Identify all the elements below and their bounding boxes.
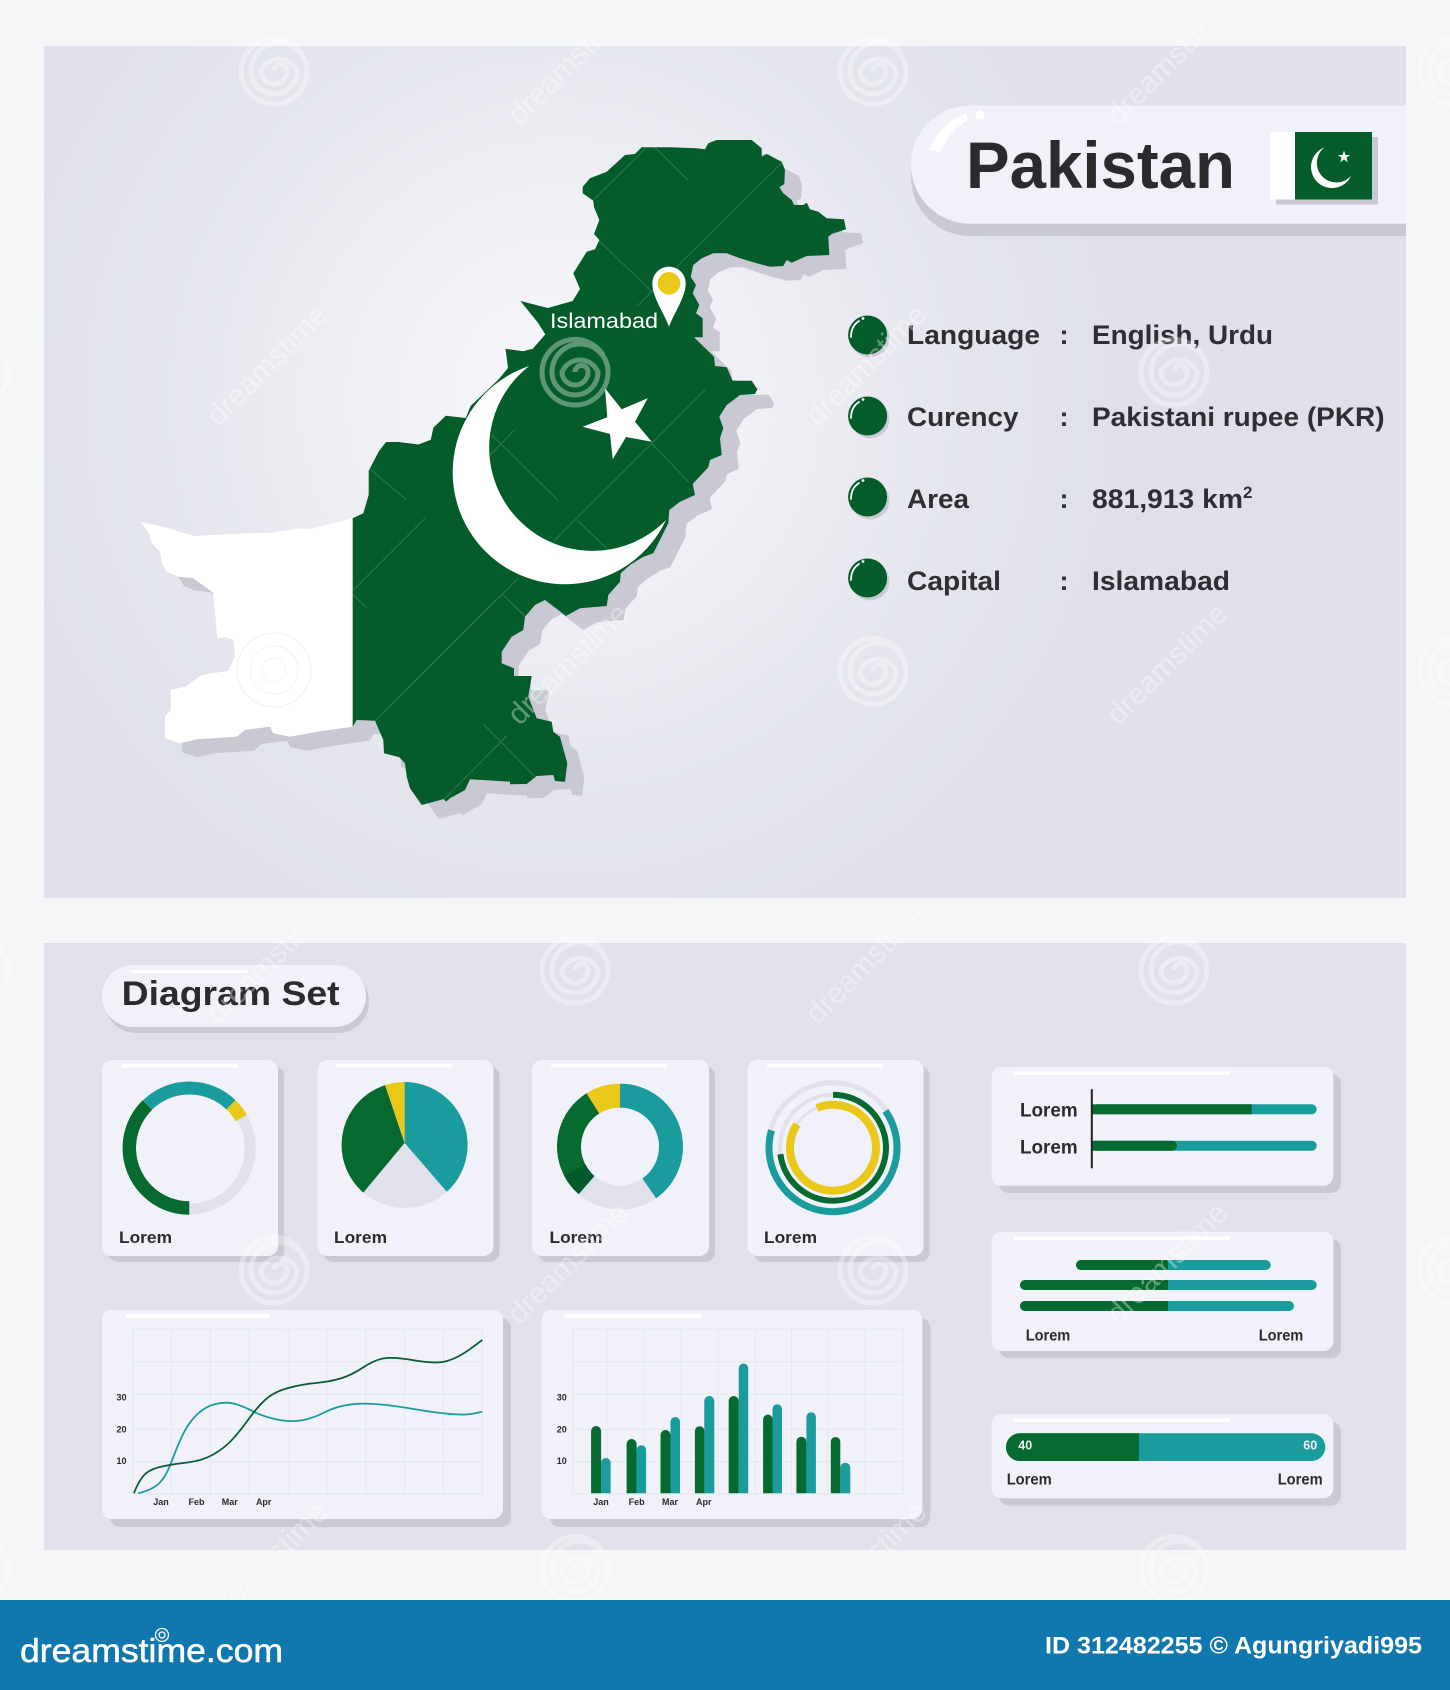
card: diverging bars: Lorem — [1259, 1328, 1303, 1345]
card: line chart: Apr — [256, 1497, 272, 1507]
card: diverging bars: Lorem — [1026, 1328, 1070, 1345]
watermark overlay: dreamstime — [1100, 1196, 1234, 1330]
map of Pakistan with flag fill — [140, 140, 863, 819]
card: line chart: Mar — [222, 1497, 238, 1507]
fact: area: 881,913 km — [1092, 484, 1243, 514]
card: 40/60 split bar — [992, 1414, 1341, 1506]
card: line chart: 20 — [116, 1424, 127, 1434]
fact: area — [848, 478, 1252, 520]
icon: capital location pin — [652, 267, 686, 327]
card: concentric rings chart — [744, 1059, 930, 1262]
fact: capital: Capital — [907, 566, 1001, 596]
fact: language: Language — [907, 320, 1040, 350]
card: donut chart: Lorem — [550, 1228, 602, 1247]
title text: Pakistan — [966, 128, 1235, 202]
fact: capital: Islamabad — [1092, 566, 1230, 596]
card: donut chart — [532, 1060, 715, 1262]
footer credit: ID 312482255 © Agungriyadi995 — [1045, 1632, 1422, 1659]
card: 40/60 split bar: 40 — [1018, 1438, 1032, 1452]
fact: capital: : — [1060, 566, 1068, 596]
fact: area: 2 — [1243, 483, 1252, 502]
icon: flag of Pakistan — [1270, 132, 1378, 204]
card: line chart: Feb — [188, 1497, 205, 1507]
card: bar chart: 10 — [557, 1456, 567, 1466]
card: 40/60 split bar: 60 — [1303, 1438, 1317, 1452]
card: diverging bars — [992, 1232, 1341, 1358]
card: line chart: 30 — [116, 1393, 127, 1403]
footer logo: dreamstime.com — [20, 1632, 283, 1669]
fact: capital — [848, 558, 1230, 600]
watermark overlay: dreamstime — [501, 1196, 635, 1330]
heading pill: Diagram Set — [102, 965, 369, 1033]
card: bar chart — [542, 1310, 930, 1527]
card: horizontal progress bars: Lorem — [1020, 1100, 1078, 1122]
card: concentric rings chart: Lorem — [764, 1228, 817, 1247]
footer bar — [0, 1600, 1450, 1690]
fact: language — [848, 316, 1273, 358]
fact: currency: : — [1060, 402, 1068, 432]
card: bar chart: Jan — [593, 1497, 609, 1507]
watermark overlay: dreamstime — [799, 896, 933, 1030]
card: bar chart: Mar — [662, 1497, 678, 1507]
card: pie chart: Lorem — [334, 1228, 387, 1247]
card: bar chart: Apr — [696, 1497, 712, 1507]
watermark overlay: dreamstime — [799, 298, 933, 432]
card: bar chart: 20 — [557, 1424, 567, 1434]
card: 40/60 split bar: Lorem — [1278, 1471, 1323, 1488]
panel: map and country facts — [44, 46, 1406, 898]
card: horizontal progress bars — [992, 1067, 1341, 1193]
card: line chart — [102, 1310, 511, 1527]
fact: area: : — [1060, 484, 1068, 514]
watermark overlay: dreamstime — [501, 0, 635, 131]
card: bar chart: Feb — [629, 1497, 645, 1507]
fact: language: English, Urdu — [1092, 320, 1273, 350]
map label: Islamabad: Islamabad — [550, 310, 658, 333]
panel: diagram set — [44, 943, 1406, 1550]
card: line chart: Jan — [153, 1497, 169, 1507]
fact: language: : — [1060, 320, 1068, 350]
card: pie chart — [318, 1060, 500, 1262]
title pill — [911, 106, 1406, 236]
watermark overlay: dreamstime — [200, 1495, 334, 1629]
fact: currency: Curency — [907, 402, 1018, 432]
fact: currency: Pakistani rupee (PKR) — [1092, 402, 1385, 432]
watermark overlay: dreamstime — [200, 896, 334, 1030]
card: 40/60 split bar: Lorem — [1007, 1471, 1052, 1488]
watermark overlay: dreamstime — [1100, 597, 1234, 731]
watermark overlay: dreamstime — [799, 1495, 933, 1629]
card: line chart: 10 — [116, 1456, 127, 1466]
card: ring chart — [102, 1060, 284, 1262]
fact: area: Area — [907, 484, 970, 514]
fact: currency — [848, 396, 1385, 438]
watermark overlay: dreamstime — [1100, 0, 1234, 131]
watermark overlay: dreamstime — [501, 597, 635, 731]
card: horizontal progress bars: Lorem — [1020, 1136, 1078, 1158]
watermark overlay: dreamstime — [200, 298, 334, 432]
heading pill: Diagram Set: Diagram Set — [122, 975, 340, 1013]
card: bar chart: 30 — [557, 1393, 567, 1403]
card: ring chart: Lorem — [119, 1228, 172, 1247]
